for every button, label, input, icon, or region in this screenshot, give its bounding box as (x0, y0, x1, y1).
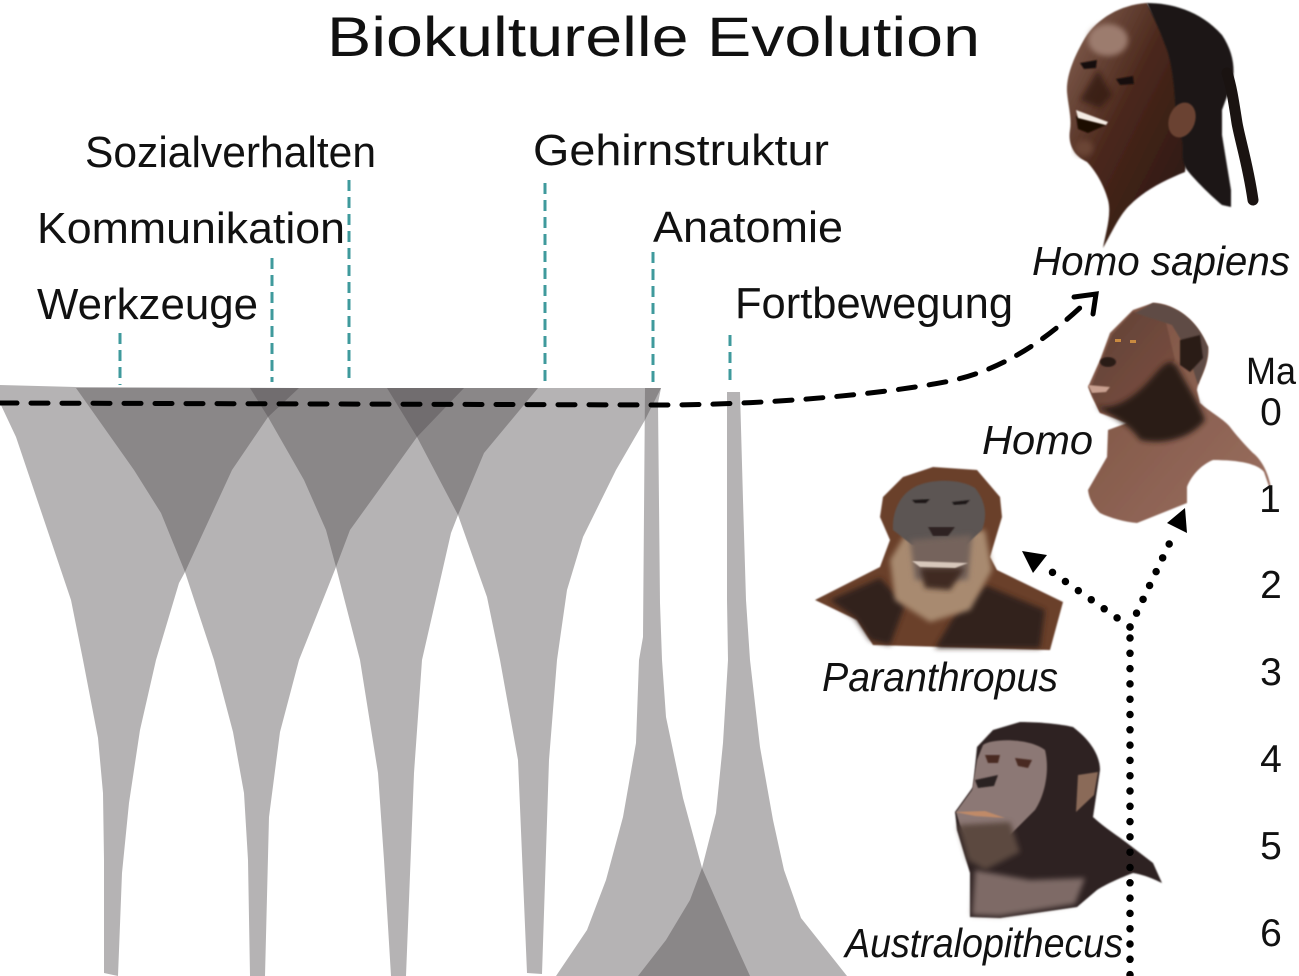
face (956, 740, 1047, 850)
braid (1227, 73, 1253, 200)
teal dashed leader lines (120, 180, 730, 385)
spindle: Gehirnstruktur (387, 388, 661, 974)
under lip shadow (920, 568, 965, 590)
spindle: Sozialverhalten (250, 388, 538, 976)
nose (928, 527, 955, 536)
nose and cheek shading (1080, 70, 1112, 108)
dotted lineage line from Australopithecus (1042, 538, 1172, 976)
dotted branch to Homo (1130, 538, 1172, 627)
lips (1088, 385, 1110, 393)
neck and chest (972, 870, 1085, 916)
spindle: Anatomie (556, 388, 750, 976)
teeth (1076, 110, 1108, 125)
spindle: Fortbewegung (638, 392, 847, 976)
dashed lineage line to Homo sapiens (0, 294, 1096, 405)
tick 0: 0 (1260, 391, 1282, 434)
eyes (912, 499, 970, 505)
tick 5: 5 (1260, 825, 1282, 868)
arrowhead: Paranthropus (1022, 551, 1047, 573)
muzzle (910, 535, 972, 580)
arrowhead: Homo (1167, 508, 1187, 533)
portrait: Paranthropus (815, 467, 1063, 650)
arrowhead (1074, 294, 1096, 314)
label: Paranthropus: Paranthropus (822, 654, 1058, 700)
hair (1135, 303, 1208, 385)
label: Homo: Homo (982, 417, 1093, 463)
beard (890, 530, 992, 622)
beard and neck shadow (1095, 362, 1205, 442)
label: Sozialverhalten: Sozialverhalten (85, 128, 376, 177)
label: Werkzeuge: Werkzeuge (37, 280, 258, 329)
forehead highlight (1088, 24, 1128, 56)
eyes (985, 755, 1032, 768)
ear (1164, 99, 1200, 141)
tick 4: 4 (1260, 738, 1282, 781)
nose (1100, 357, 1116, 367)
eyes (1115, 339, 1136, 343)
portrait: Homo (1088, 303, 1272, 523)
chest shadow (830, 578, 1045, 648)
spindle: Kommunikation (76, 388, 464, 976)
mouth (1076, 116, 1106, 133)
title: Biokulturelle Evolution (327, 5, 980, 68)
chin fur (958, 822, 1020, 870)
face and neck (1067, 3, 1190, 248)
portrait: Australopithecus (955, 722, 1162, 918)
spindle chart: trait evolution (0, 385, 847, 976)
label: Gehirnstruktur: Gehirnstruktur (533, 126, 829, 175)
tick 3: 3 (1260, 651, 1282, 694)
spindle: Werkzeuge (0, 385, 299, 976)
lips (955, 811, 1005, 818)
face (893, 481, 985, 545)
tick 2: 2 (1260, 564, 1282, 607)
tick 6: 6 (1260, 912, 1282, 955)
bust (815, 467, 1063, 650)
label: Fortbewegung: Fortbewegung (735, 279, 1013, 328)
label: Kommunikation: Kommunikation (37, 204, 345, 253)
nose (975, 775, 998, 788)
label: Australopithecus: Australopithecus (842, 920, 1123, 966)
hair mass (1147, 3, 1234, 207)
tick 1: 1 (1259, 478, 1281, 521)
time axis in million years (1246, 351, 1297, 955)
axis unit: Ma (1246, 351, 1297, 393)
chin highlight (1075, 140, 1093, 156)
bust (955, 722, 1162, 918)
eyes (1080, 60, 1134, 85)
bust (1088, 303, 1272, 523)
portrait: Homo sapiens (1067, 3, 1253, 248)
dotted branch to Paranthropus (1042, 565, 1130, 627)
label: Homo sapiens: Homo sapiens (1032, 238, 1290, 284)
ear (1180, 335, 1203, 372)
face (1090, 312, 1175, 415)
ear (1076, 772, 1098, 812)
mouth (912, 561, 968, 568)
label: Anatomie: Anatomie (653, 203, 843, 252)
category labels (37, 126, 1013, 329)
